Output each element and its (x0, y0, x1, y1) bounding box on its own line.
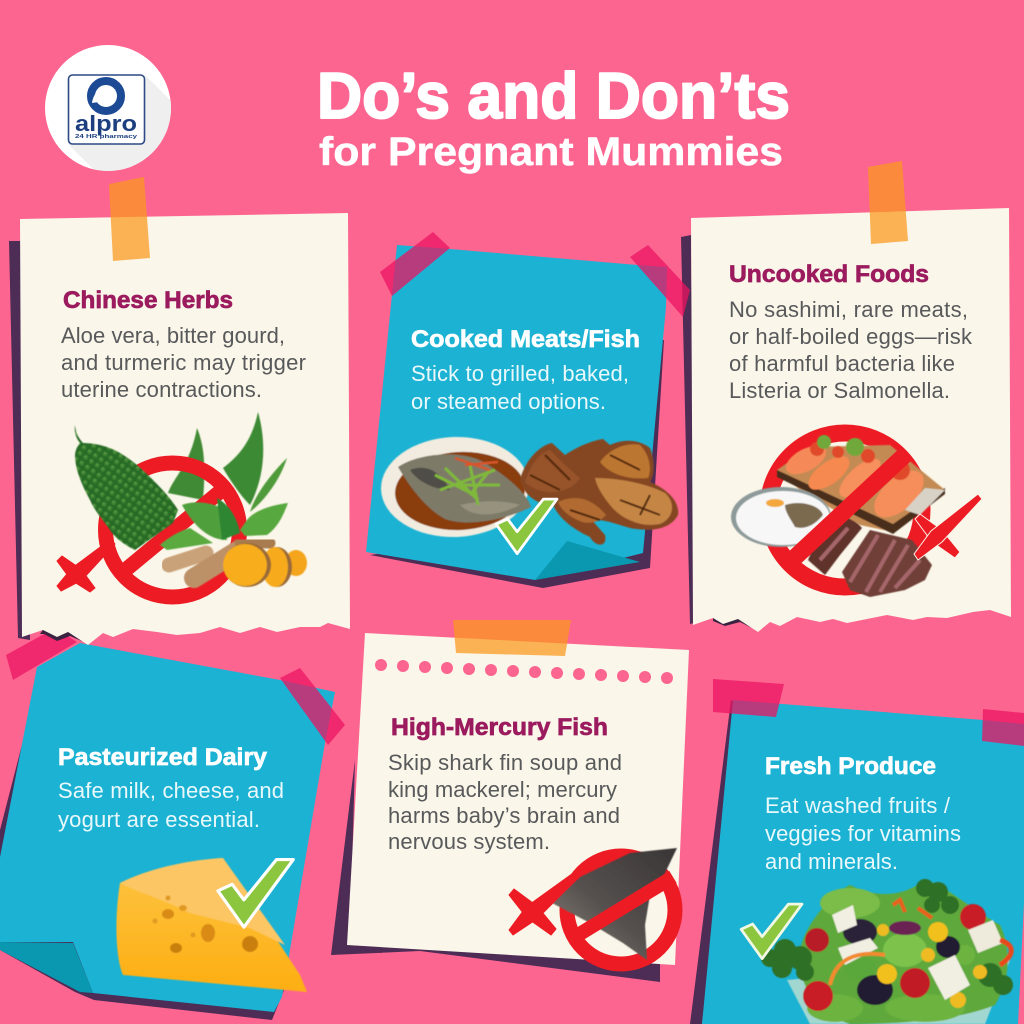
icon: steamed fish plate (379, 434, 531, 540)
icon: soft-boiled egg bowl (731, 487, 831, 547)
panel: chinese herbs: uterine contractions. (61, 377, 262, 402)
panel: cooked meats and fish: or steamed options. (411, 389, 606, 414)
icon: red x mark (914, 494, 982, 560)
panel: pasteurized dairy (0, 628, 345, 1020)
icon: red x mark (509, 871, 580, 935)
panel: high-mercury fish (331, 620, 689, 982)
icon: salad bowl (761, 879, 1013, 1024)
logo badge: alpro (75, 111, 137, 136)
logo badge: 24 HR pharmacy (75, 134, 137, 140)
panel: uncooked foods (691, 161, 1011, 632)
icon: herb leaves (160, 498, 288, 550)
panel: chinese herbs: Aloe vera, bitter gourd, (61, 323, 285, 348)
logo badge (45, 45, 171, 171)
icon: prohibition ring (567, 856, 675, 964)
punched holes (375, 659, 673, 684)
prohibition slash (790, 453, 907, 562)
panel: uncooked foods: of harmful bacteria like (729, 351, 955, 376)
panel: uncooked foods: or half-boiled eggs—risk (729, 324, 973, 349)
title: for Pregnant Mummies (319, 130, 783, 174)
icon: aloe leaf behind ring (168, 428, 204, 500)
title: Do’s and Don’ts (317, 59, 790, 132)
icon: roast chicken (520, 439, 678, 545)
panel: high-mercury fish: High-Mercury Fish (391, 714, 608, 741)
icon: prohibition ring (768, 433, 922, 587)
prohibition slash (123, 490, 222, 572)
panel: fresh produce: veggies for vitamins (765, 821, 961, 846)
icon: cheese wedge (116, 858, 307, 992)
panel: cooked meats and fish (366, 232, 694, 624)
panel: chinese herbs: and turmeric may trigger (61, 350, 306, 375)
panel: high-mercury fish: nervous system. (388, 829, 550, 854)
icon: bitter gourd (75, 425, 178, 550)
panel: uncooked foods: No sashimi, rare meats, (729, 297, 968, 322)
panel: fresh produce: and minerals. (765, 849, 898, 874)
icon: aloe vera leaves (223, 412, 287, 512)
icon: meat slices (808, 515, 932, 597)
icon: green check (218, 860, 293, 927)
prohibition slash (578, 877, 673, 935)
icon: shark fin (552, 848, 677, 960)
panel: fresh produce (690, 679, 1024, 1024)
panel: pasteurized dairy: Pasteurized Dairy (58, 744, 268, 771)
panel: cooked meats and fish: Cooked Meats/Fish (411, 326, 640, 353)
panel: high-mercury fish: king mackerel; mercury (388, 777, 617, 802)
title (317, 59, 790, 174)
panel: uncooked foods: Listeria or Salmonella. (729, 378, 950, 403)
panel: chinese herbs: Chinese Herbs (63, 287, 233, 314)
icon: ginger and turmeric (169, 542, 307, 587)
icon: red x mark (57, 539, 115, 592)
icon: sushi board (777, 435, 945, 534)
panel: pasteurized dairy: yogurt are essential. (58, 807, 260, 832)
panel: pasteurized dairy: Safe milk, cheese, and (58, 778, 284, 803)
panel: high-mercury fish: Skip shark fin soup and (388, 750, 622, 775)
panel: fresh produce: Fresh Produce (765, 753, 936, 780)
panel: fresh produce: Eat washed fruits / (765, 793, 951, 818)
icon: green check (496, 499, 557, 554)
icon: prohibition ring (106, 463, 240, 597)
panel: high-mercury fish: harms baby’s brain and (388, 803, 620, 828)
panel: chinese herbs (9, 177, 350, 645)
panel: uncooked foods: Uncooked Foods (729, 261, 929, 288)
panel: cooked meats and fish: Stick to grilled, baked, (411, 361, 629, 386)
icon: green check (741, 904, 802, 959)
